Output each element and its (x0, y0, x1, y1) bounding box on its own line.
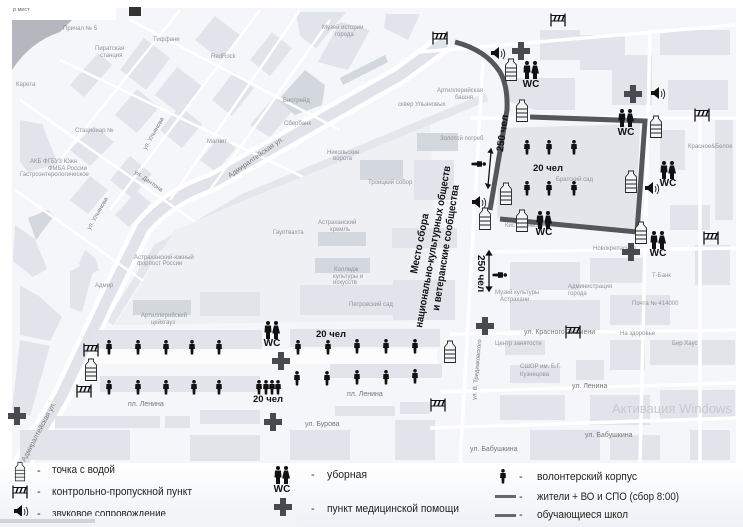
legend: volunteers: - (519, 471, 523, 483)
toilets: WC (523, 79, 539, 90)
legend: checkpoint (13, 486, 192, 498)
legend: sound: - (37, 508, 41, 520)
legend: water: - (37, 465, 41, 477)
map labels: искусств (333, 280, 357, 286)
map labels: ул. Дантона (133, 170, 164, 194)
map labels: ул. В. Тредиаковского (472, 339, 483, 400)
toilets: WC (618, 127, 634, 138)
legend: toilet: - (311, 469, 315, 481)
label: 250 people lower: 250 чел (475, 255, 486, 292)
label: meeting place: и ветеранские сообщества (430, 184, 462, 311)
volunteers: lenin upper row (106, 339, 418, 354)
map labels: СШОР им. Б.Г. (520, 364, 561, 370)
legend: students line: обучающиеся школ (537, 509, 628, 521)
map labels: На здоровье (620, 331, 656, 337)
map labels: Карета (16, 82, 36, 88)
label: meeting place: национально-культурных обществ (413, 164, 454, 329)
map labels: Адмир (95, 283, 114, 289)
square garden (497, 124, 640, 232)
map labels: ул. Бурова (305, 421, 340, 428)
label: 20 people square: 20 чел (533, 163, 563, 174)
top search panel (12, 0, 141, 20)
east blocks (497, 30, 735, 460)
top search panel: р мест (13, 7, 30, 13)
map labels: Почта № 414000 (632, 300, 679, 307)
map labels: Бир Хаус (672, 341, 698, 347)
map labels: ворота (333, 156, 353, 162)
map labels: ул. Бабушкина (585, 431, 633, 439)
map labels: цейхгауз (151, 319, 175, 326)
legend: volunteers (500, 469, 637, 484)
legend: medical: пункт медицинской помощи (327, 503, 459, 515)
legend: students line (495, 509, 628, 521)
map labels: Активация Windows (612, 401, 732, 416)
checkpoints (77, 14, 718, 412)
legend: checkpoint: - (37, 486, 41, 498)
map labels: ул. Бабушкина (470, 445, 518, 453)
legend: medical (274, 498, 459, 516)
legend: water (15, 463, 115, 481)
toilets: WC (536, 227, 552, 238)
map labels: Тиффани (153, 37, 180, 43)
toilets: WC (660, 178, 676, 189)
map labels: Т-Банк (652, 273, 671, 279)
map labels: АКБ ФГБУЗ Южн (30, 159, 77, 165)
river (12, 20, 72, 70)
lenin square blocks (20, 329, 442, 461)
medical points (8, 42, 642, 431)
map labels: Гастроэнтерологическое (20, 172, 90, 178)
map labels: Биотрейд (283, 97, 310, 104)
legend: toilet: WC (274, 484, 290, 495)
map labels: Артиллерийский (141, 312, 187, 319)
arrow: lower double arrow (486, 251, 492, 291)
map labels: Золотой погреб (440, 135, 484, 142)
map labels: RedRock (211, 54, 237, 60)
volunteers in square (524, 140, 577, 196)
map labels: Новокрепасная (593, 246, 636, 252)
map labels: Петровский сад (349, 301, 393, 308)
map labels: Братский сад (556, 176, 593, 183)
label: 20 people lenin north: 20 чел (316, 329, 346, 340)
map labels: ул. Ульянова (87, 196, 110, 231)
map labels: Магнит (207, 139, 227, 145)
label: 250 people along road: 250 чел (495, 114, 511, 152)
map labels: Центр занятости (495, 341, 542, 347)
map labels: Гауптвахта (273, 230, 304, 236)
route: square perimeter (500, 117, 645, 232)
label: 20 people lenin south: 20 чел (253, 394, 283, 405)
kremlin area blocks (115, 125, 458, 325)
legend: medical: - (311, 503, 315, 515)
map labels: ул. Ленина (572, 383, 607, 390)
legend: toilet (274, 466, 367, 495)
map labels: культуры и (333, 274, 363, 280)
toilets: WC (650, 248, 666, 259)
legend: residents line: - (519, 491, 523, 503)
north-west street blocks (12, 12, 420, 416)
map labels: ул. Красного Знамени (524, 329, 595, 336)
map labels: Кузнецова (520, 372, 550, 378)
legend: volunteers: волонтерский корпус (537, 471, 637, 483)
map labels: города (568, 291, 587, 297)
streets north-west (15, 10, 340, 300)
legend: toilet: уборная (327, 469, 367, 481)
volunteers: lenin lower row (106, 369, 418, 394)
map labels: Музей культуры (495, 289, 539, 296)
map labels: Астрахани (500, 297, 529, 303)
map labels: города (335, 32, 354, 38)
map labels: Пиратская (95, 46, 124, 52)
legend: checkpoint: контрольно-пропускной пункт (52, 486, 192, 498)
map labels: пл. Ленина (128, 401, 164, 408)
map labels: Сбербанк (284, 121, 311, 127)
admiralteyskaya road (0, 42, 445, 520)
legend: sound (14, 505, 166, 520)
map labels: ул. Ульянова (143, 116, 166, 151)
map labels: башня (455, 95, 473, 101)
water points (86, 59, 662, 380)
map labels: пл. Ленина (347, 391, 383, 398)
map labels: Адмиралтейская ул. (20, 401, 58, 463)
arrow: upper double arrow (486, 149, 492, 188)
map labels: форпост России (137, 261, 182, 267)
label: meeting place: Место сбора (408, 212, 432, 275)
toilets: WC (264, 338, 280, 349)
map labels: Астраханский (318, 219, 356, 226)
map labels: Кистодиевская (505, 223, 546, 229)
map labels: Причал № 5 (63, 25, 98, 32)
legend: sound: звуковое сопровождение (52, 508, 166, 520)
map labels: Красное&Белое (688, 144, 733, 150)
map labels: Артиллерийская (437, 87, 483, 94)
map labels: Никольские (327, 150, 360, 156)
route: volunteers line (455, 42, 507, 210)
legend (0, 463, 743, 527)
map labels: станция (100, 53, 122, 59)
map labels: сквер Ульяновых (398, 102, 446, 108)
map labels: ФМБА России (48, 166, 87, 172)
toilets (264, 61, 676, 349)
legend: water: точка с водой (52, 464, 115, 476)
map labels: Музей истории (322, 24, 364, 31)
map labels: Администрация (568, 284, 612, 290)
map labels: Стационар № (75, 127, 114, 134)
map labels: Астраханский-южный (134, 254, 194, 261)
map labels: кремль (330, 227, 350, 233)
legend: residents line: жители + ВО и СПО (сбор 8:00) (537, 491, 679, 503)
legend: students line: - (519, 509, 523, 521)
volunteer: lying upper (472, 161, 486, 167)
map labels: Адмиралтейская ул. (227, 135, 285, 180)
east streets (420, 25, 736, 463)
sound points (472, 47, 665, 208)
legend bottom clip band (0, 516, 300, 527)
volunteer: lying lower (492, 272, 507, 278)
map labels: Колледж (334, 267, 358, 273)
map labels: Троицкий собор (368, 179, 413, 186)
park boundary band (110, 97, 487, 323)
